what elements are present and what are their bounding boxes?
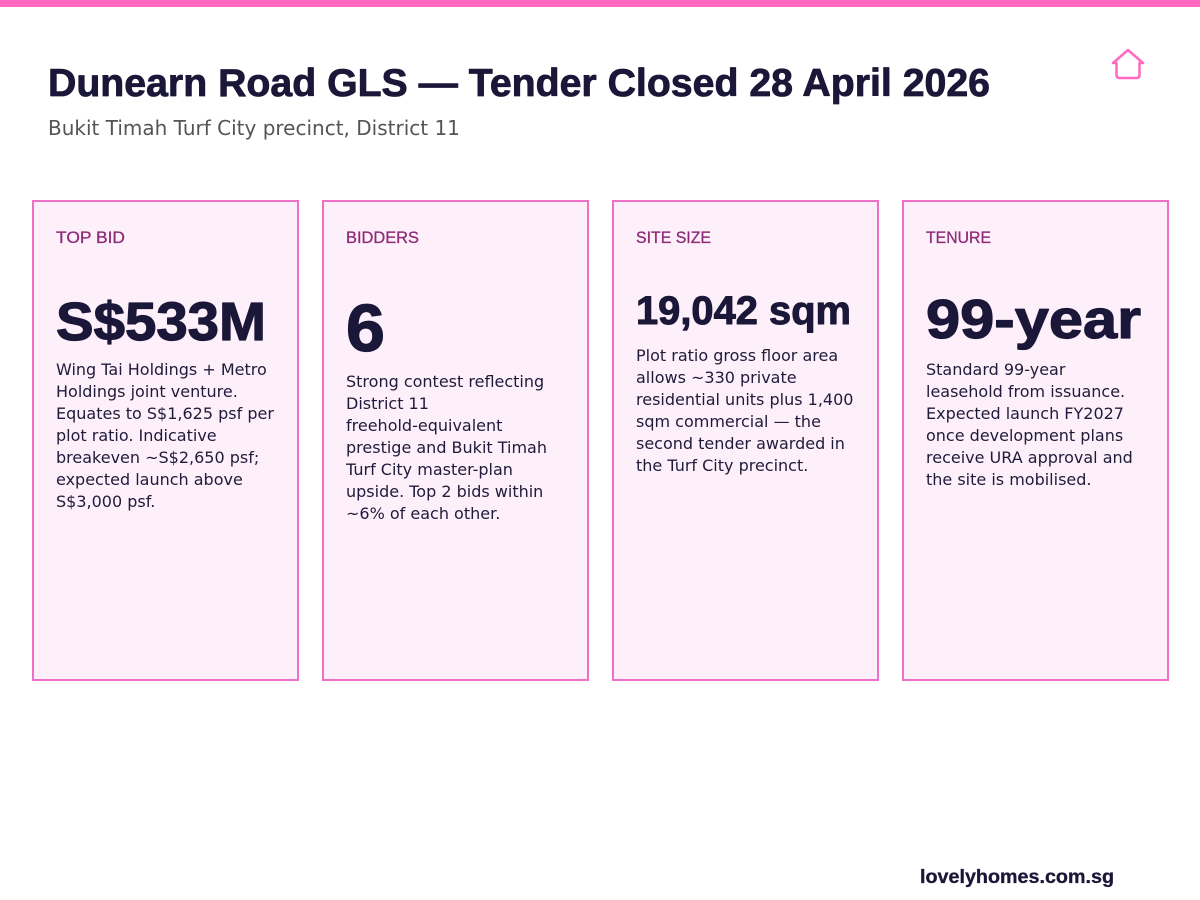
panel: top bid bbox=[33, 201, 298, 680]
description: site size bbox=[636, 346, 853, 475]
description: tenure: the site is mobilised. bbox=[926, 470, 1091, 489]
footer: website: lovelyhomes.com.sg bbox=[920, 867, 1114, 888]
description: top bid: expected launch above bbox=[56, 470, 243, 489]
description: bidders: Strong contest reflecting bbox=[346, 372, 544, 391]
stat: S$533M: S$533M bbox=[56, 292, 266, 352]
top accent bar bbox=[0, 0, 1200, 7]
icon: house bbox=[1113, 50, 1143, 78]
description: bidders: Turf City master-plan bbox=[345, 460, 513, 479]
panel: tenure bbox=[903, 201, 1168, 680]
description: bidders: District 11 bbox=[346, 394, 429, 413]
description: top bid: Holdings joint venture. bbox=[56, 382, 238, 401]
label: top bid: TOP BID bbox=[56, 228, 125, 247]
title: Dunearn Road GLS — Tender Closed 28 April 2026 bbox=[48, 62, 990, 105]
description: site size: the Turf City precinct. bbox=[636, 456, 808, 475]
label: site size: SITE SIZE bbox=[636, 228, 711, 247]
description: bidders: upside. Top 2 bids within bbox=[346, 482, 543, 501]
panel: site size bbox=[613, 201, 878, 680]
description: bidders: freehold-equivalent bbox=[346, 416, 502, 435]
description: tenure: Standard 99-year bbox=[926, 360, 1066, 379]
description: site size: residential units plus 1,400 bbox=[636, 390, 853, 409]
description: top bid: Equates to S$1,625 psf per bbox=[56, 404, 274, 423]
description: site size: Plot ratio gross floor area bbox=[636, 346, 838, 365]
panel: bidders bbox=[323, 201, 588, 680]
subtitle: Bukit Timah Turf City precinct, District 11 bbox=[48, 116, 460, 140]
label: tenure: TENURE bbox=[926, 228, 991, 247]
description: bidders: prestige and Bukit Timah bbox=[346, 438, 547, 457]
description: top bid: plot ratio. Indicative bbox=[56, 426, 217, 445]
description: tenure: receive URA approval and bbox=[926, 448, 1133, 467]
description: site size: second tender awarded in bbox=[636, 434, 845, 453]
description: site size: sqm commercial — the bbox=[636, 412, 821, 431]
description: top bid: Wing Tai Holdings + Metro bbox=[56, 360, 267, 379]
description: tenure: once development plans bbox=[926, 426, 1123, 445]
description: site size: allows ~330 private bbox=[636, 368, 797, 387]
stat: 19,042 sqm: 19,042 sqm bbox=[636, 289, 851, 333]
description: top bid: S$3,000 psf. bbox=[56, 492, 155, 511]
description: bidders: ~6% of each other. bbox=[346, 504, 500, 523]
stat: 6: 6 bbox=[346, 291, 385, 366]
description: tenure: leasehold from issuance. bbox=[926, 382, 1125, 401]
description: tenure: Expected launch FY2027 bbox=[926, 404, 1124, 423]
description: bidders bbox=[345, 372, 547, 523]
stat: 99-year: 99-year bbox=[926, 288, 1141, 350]
description: top bid bbox=[56, 360, 274, 511]
description: top bid: breakeven ~S$2,650 psf; bbox=[56, 448, 259, 467]
label: bidders: BIDDERS bbox=[346, 228, 419, 247]
description: tenure bbox=[926, 360, 1133, 489]
